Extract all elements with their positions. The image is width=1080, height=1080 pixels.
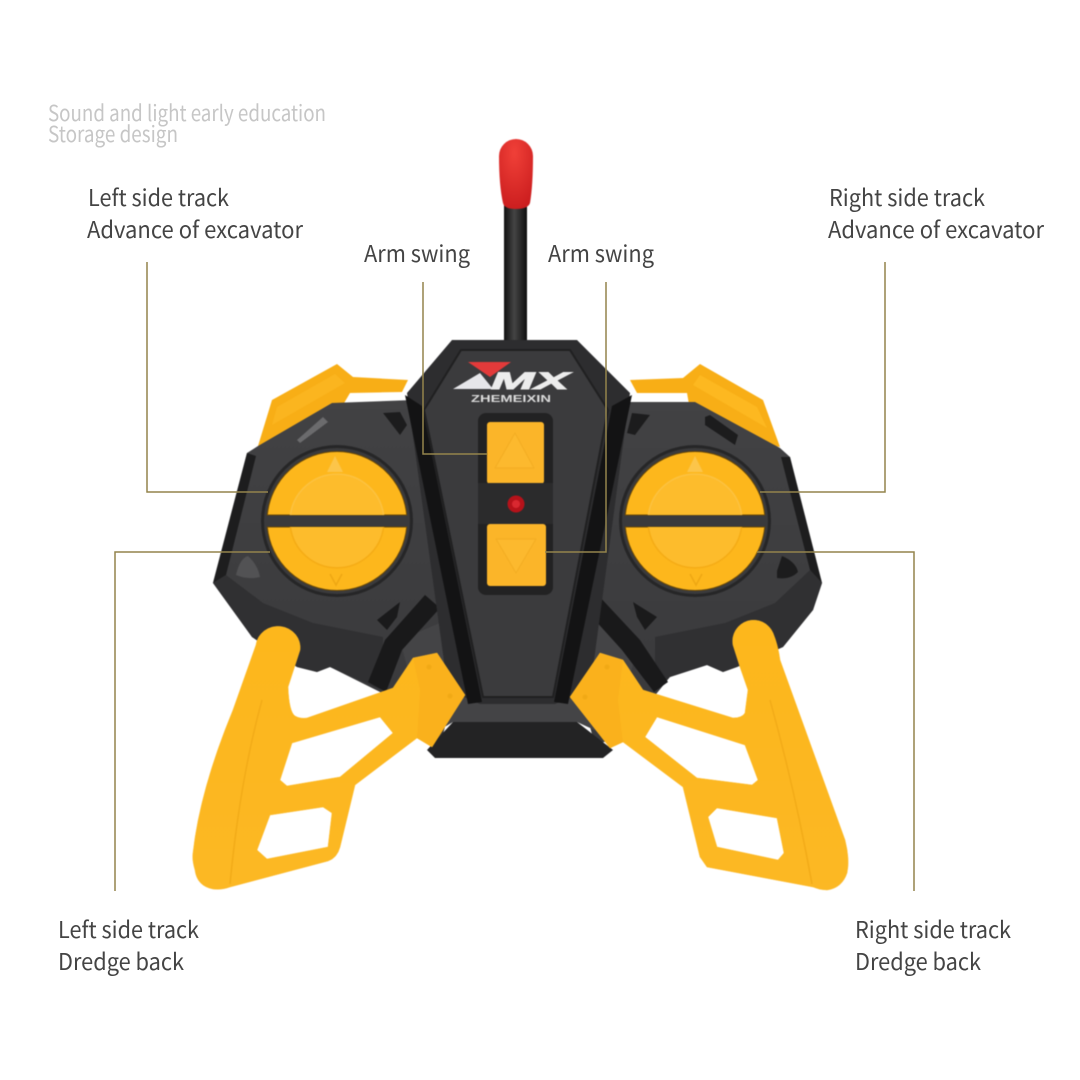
centre panel of housing — [405, 340, 632, 704]
callout: right arm swing — [545, 235, 654, 552]
centre buttons — [478, 413, 553, 595]
callout: right side track dredge back: Dredge back — [855, 943, 981, 977]
remote controller — [193, 340, 848, 890]
callout: right side track advance: Right side track — [829, 179, 985, 213]
logo: ZMX brand — [453, 362, 573, 405]
callout: right arm swing: Arm swing — [548, 235, 654, 269]
left dark groove — [368, 595, 440, 692]
callout: left arm swing — [364, 235, 487, 454]
up button — [487, 422, 544, 484]
logo: ZMX brand: ZHEMEIXIN — [471, 394, 551, 405]
callout: left side track advance: Advance of excavator — [87, 211, 303, 245]
right handle — [570, 620, 848, 890]
right dark groove — [584, 595, 668, 692]
right wing of housing — [555, 402, 822, 745]
callout: left side track advance: Left side track — [88, 179, 229, 213]
callout: left side track advance — [87, 179, 303, 492]
callout: right side track advance: Advance of excavator — [828, 211, 1044, 245]
left yellow shoulder — [258, 364, 408, 446]
subtitle text: Sound and light early education — [48, 96, 326, 128]
down button — [487, 524, 546, 586]
callout: left arm swing: Arm swing — [364, 235, 470, 269]
callout: right side track advance — [760, 179, 1044, 492]
right yellow shoulder — [630, 364, 780, 447]
left wing of housing — [213, 400, 480, 745]
callout: left side track dredge back: Dredge back — [58, 943, 184, 977]
subtitle text: Storage design — [48, 117, 178, 149]
callout: left side track dredge back: Left side track — [58, 911, 199, 945]
logo: ZMX brand: MX — [491, 368, 573, 395]
right joystick — [619, 445, 771, 597]
callout: right side track dredge back: Right side track — [855, 911, 1011, 945]
centre base of housing — [400, 610, 640, 758]
callout: right side track dredge back — [757, 552, 1011, 977]
callout: left side track dredge back — [58, 552, 270, 977]
left joystick — [261, 445, 413, 597]
subtitle text — [48, 96, 326, 149]
left handle — [193, 626, 465, 889]
icon: antenna with red cap — [499, 139, 533, 345]
led band — [478, 483, 553, 524]
